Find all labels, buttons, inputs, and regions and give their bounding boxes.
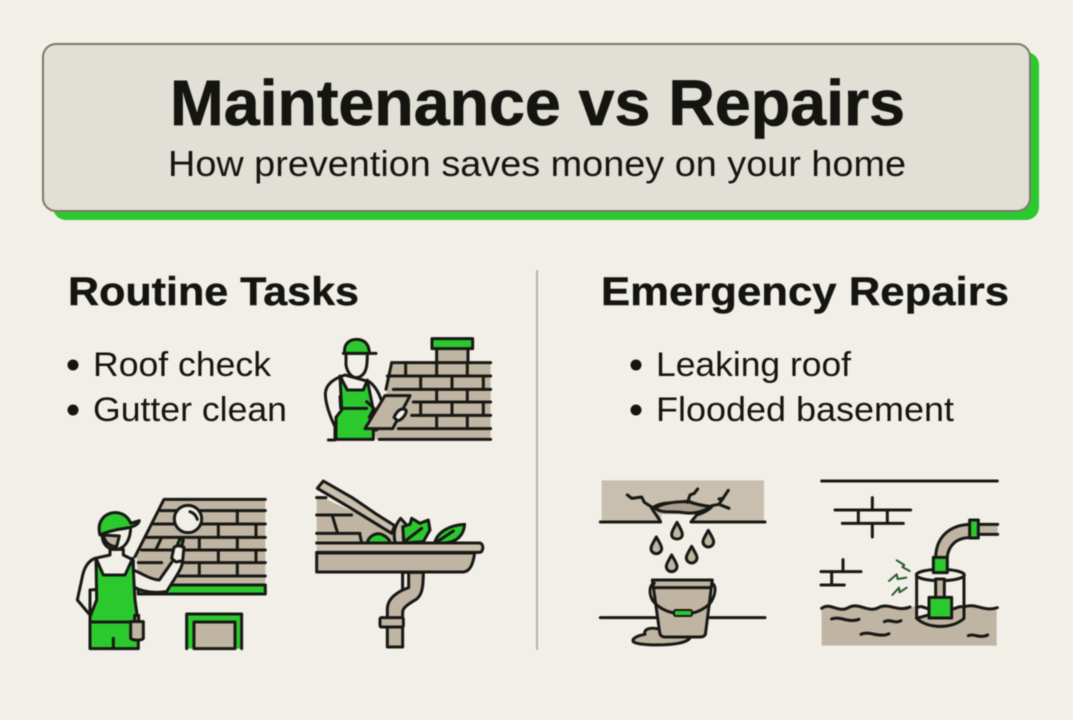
- icon: leaking ceiling and bucket: [600, 480, 765, 645]
- icon: worker inspecting roof with magnifier: [77, 499, 265, 649]
- list: emergency repairs: [630, 346, 955, 429]
- title: Maintenance vs Repairs: [170, 67, 905, 139]
- list: emergency repairs: Flooded basement: [656, 391, 955, 429]
- icon: flooded basement with sump pump: [821, 481, 998, 646]
- heading: emergency repairs: Emergency Repairs: [601, 270, 1009, 314]
- icon: gutter with leaves and downspout: [317, 481, 483, 647]
- list: routine tasks: Gutter clean: [93, 391, 287, 429]
- heading: routine tasks: Routine Tasks: [68, 270, 359, 314]
- list: emergency repairs: Leaking roof: [656, 346, 852, 384]
- header banner: [43, 44, 1039, 220]
- panel: routine tasks: [68, 270, 491, 649]
- divider: [536, 270, 538, 650]
- list: routine tasks: Roof check: [93, 346, 272, 384]
- icon: worker with clipboard and chimney: [325, 339, 491, 440]
- subtitle: How prevention saves money on your home: [168, 143, 906, 184]
- list: routine tasks: [68, 346, 287, 429]
- panel: emergency repairs: [600, 270, 1009, 646]
